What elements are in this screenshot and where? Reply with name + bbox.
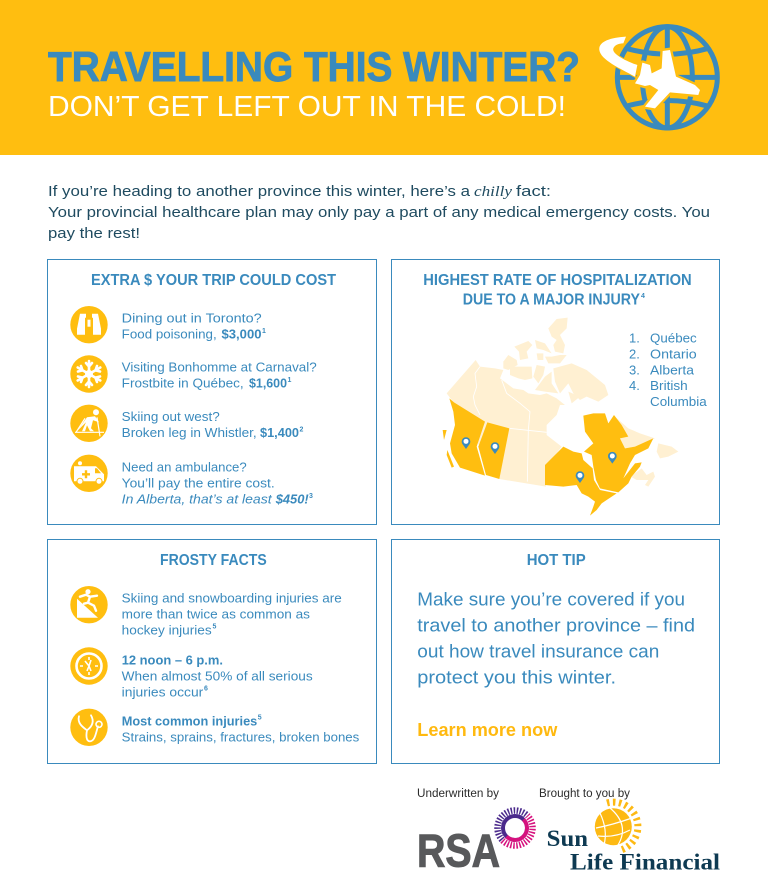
ranked province list: Ontario [650,346,697,361]
heading: HOT TIP [527,552,586,569]
item: frostbite: $1,600 [249,376,287,391]
fact: skiing injuries: 5 [212,624,216,630]
fact: skiing injuries: Skiing and snowboarding injuries are [122,591,342,606]
tip text: Make sure you’re covered if you [417,590,685,610]
icon: falling skier [70,586,108,623]
icon: snowflake [70,355,108,393]
item: ambulance: $450! [275,492,309,507]
icon: skier [70,405,108,442]
item: ambulance: Need an ambulance? [122,460,247,475]
item: ambulance: In Alberta, that’s at least [122,492,273,507]
logo: Sun Life Financial: Brought to you by [539,788,630,800]
heading: 4 [641,293,645,300]
fact: noon to six: injuries occur [122,684,204,699]
item: food poisoning: 1 [262,328,266,335]
ranked province list: 3. [629,362,640,377]
panel: hot tip [392,540,720,764]
item: broken leg: 2 [300,426,304,434]
item: food poisoning: Dining out in Toronto? [122,311,262,326]
logo: Sun Life Financial [539,788,720,874]
icon: stethoscope [70,709,108,746]
intro text: chilly [474,184,512,200]
ranked province list: Alberta [650,362,695,377]
ranked province list: 4. [629,378,640,393]
intro text [48,183,710,242]
item: food poisoning: $3,000 [222,327,262,342]
tip text: protect you this winter. [417,668,616,688]
heading: HIGHEST RATE OF HOSPITALIZATION [423,272,692,289]
map pins [462,437,617,483]
ranked province list: 2. [629,346,640,361]
tip text: travel to another province – find [417,616,695,636]
fact: common injuries: Most common injuries [122,713,257,728]
title: TRAVELLING THIS WINTER? [48,43,580,90]
tip text [417,590,695,688]
heading: FROSTY FACTS [160,552,267,569]
heading [423,272,692,308]
tip text: out how travel insurance can [417,642,659,662]
panel: extra cost [48,260,376,524]
item: frostbite [122,360,317,391]
item: frostbite: Frostbite in Québec, [122,376,244,391]
ranked province list: Columbia [650,394,707,409]
item: broken leg [122,409,304,440]
fact: common injuries: Strains, sprains, fractures, broken bones [122,730,360,745]
heading: DUE TO A MAJOR INJURY [463,291,640,308]
item: ambulance: You’ll pay the entire cost. [122,476,275,491]
map of Canada [443,318,678,516]
logo: RSA: RSA [417,824,500,876]
item: broken leg: Skiing out west? [122,409,220,424]
icon: globe with plane [599,27,717,128]
ranked province list: British [650,378,688,393]
item: ambulance [122,460,313,507]
item: food poisoning [122,311,266,342]
intro text: If you’re heading to another province this winter, here’s a [48,183,471,200]
intro text: pay the rest! [48,225,140,242]
panel: hospitalization map [392,260,720,524]
panel: frosty facts [48,540,376,764]
logo: RSA: Underwritten by [417,788,499,800]
icon: clock [70,647,108,685]
icon: binoculars [70,306,108,343]
intro text: Your provincial healthcare plan may only pay a part of any medical emergency costs. You [48,204,710,221]
item: frostbite: 1 [288,377,292,384]
intro text: fact: [516,183,551,200]
sun globe [595,802,638,850]
item: frostbite: Visiting Bonhomme at Carnaval? [122,360,317,375]
subtitle: DON’T GET LEFT OUT IN THE COLD! [48,91,566,123]
logo: Sun Life Financial: Sun [547,826,588,851]
fact: skiing injuries [122,591,342,637]
ranked province list [629,330,707,409]
link: learn more: Learn more now [417,720,558,740]
item: ambulance: 3 [309,493,313,500]
fact: noon to six: When almost 50% of all serious [122,668,313,683]
ranked province list: 1. [629,330,640,345]
logo: Sun Life Financial: Life Financial [570,849,720,874]
icon: ambulance [70,455,108,492]
fact: noon to six [122,652,313,699]
item: broken leg: Broken leg in Whistler, [122,425,257,440]
fact: skiing injuries: hockey injuries [122,622,212,637]
fact: noon to six: 12 noon – 6 p.m. [122,652,223,667]
fact: noon to six: 6 [204,686,208,692]
logo: RSA [417,788,533,876]
item: food poisoning: Food poisoning, [122,327,217,342]
header banner [0,0,768,155]
ranked province list: Québec [650,330,697,345]
sunburst [498,810,533,846]
heading: EXTRA $ YOUR TRIP COULD COST [91,272,336,289]
fact: common injuries [122,713,360,745]
fact: common injuries: 5 [258,714,262,722]
item: broken leg: $1,400 [260,425,299,440]
fact: skiing injuries: more than twice as common as [122,606,311,621]
